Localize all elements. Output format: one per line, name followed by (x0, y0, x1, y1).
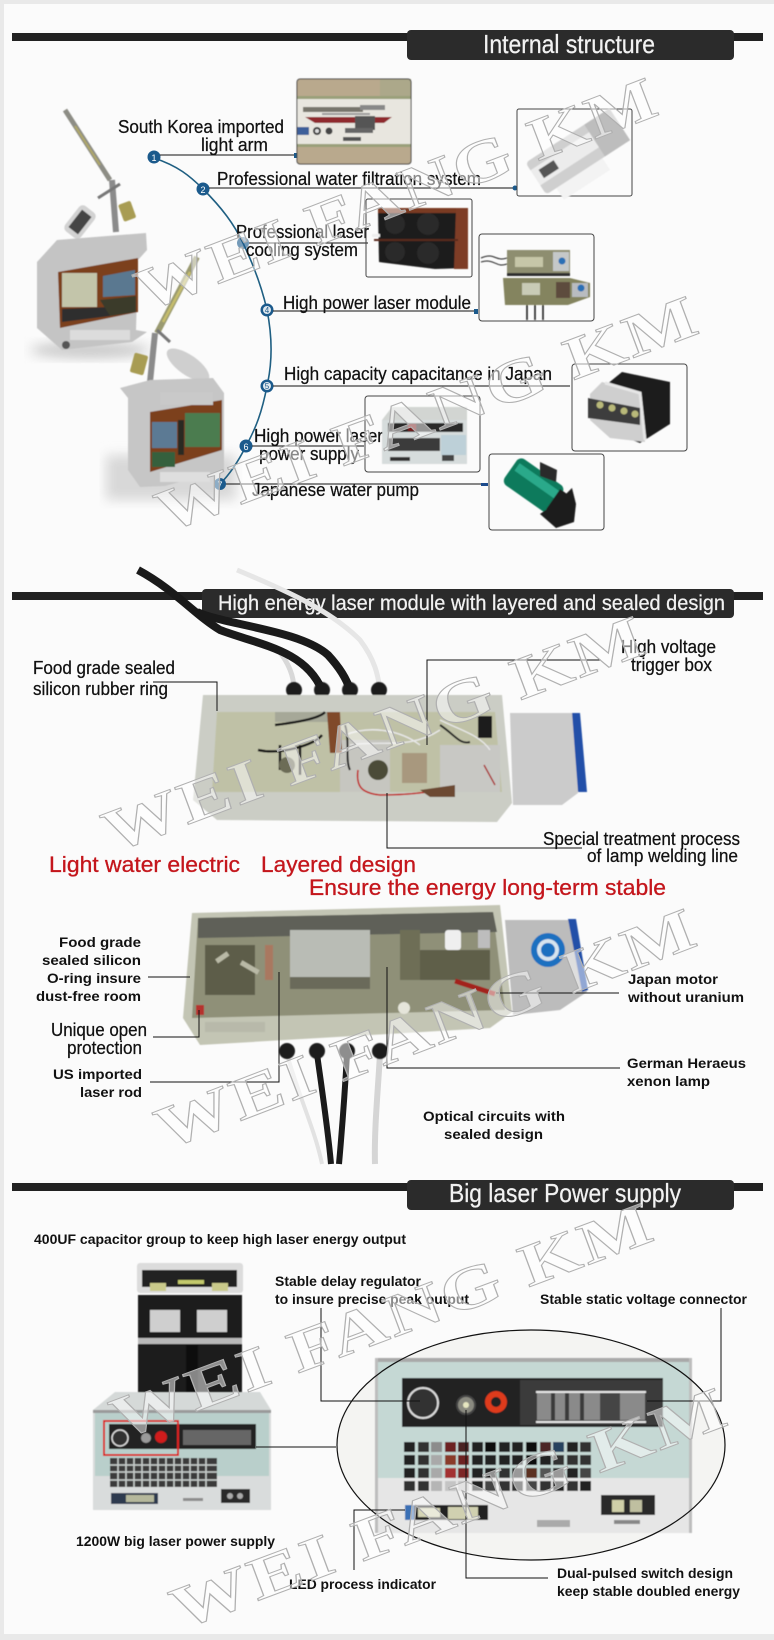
photo: power supply front (93, 1392, 271, 1510)
label: dual-pulsed switch: Dual-pulsed switch design (557, 1566, 733, 1581)
label: LED indicator (289, 1510, 437, 1592)
callout 6: power supply (240, 426, 383, 464)
label: trigger box: trigger box (631, 655, 712, 675)
label: japan motor: without uranium (627, 990, 744, 1005)
heading bar: laser module (12, 589, 763, 618)
caption: 1200W supply: 1200W big laser power supply (76, 1534, 276, 1549)
label: delay regulator (275, 1274, 470, 1401)
callout 3: cooling system (236, 222, 369, 260)
callout 4: laser module: 4 (265, 306, 270, 315)
section: power supply (12, 1178, 763, 1599)
watermark 2: WEI FANG KM (146, 282, 708, 545)
label: O-ring (36, 935, 190, 1004)
label: open protection: Unique open (51, 1020, 147, 1040)
label: dual-pulsed switch (466, 1410, 740, 1599)
watermark 4: WEI FANG KM (146, 894, 706, 1162)
label: voltage connector: Stable static voltage connector (540, 1292, 748, 1307)
magnified view (337, 1330, 725, 1560)
label: laser rod: US imported (53, 1067, 142, 1082)
callout 6: power supply: High power laser (254, 426, 383, 446)
label: xenon lamp: German Heraeus (627, 1056, 746, 1071)
label: optical circuits: Optical circuits with (423, 1109, 565, 1124)
label: O-ring: dust-free room (36, 989, 141, 1004)
watermark 1: WEI FANG KM (126, 64, 668, 324)
photo: capacitor (572, 364, 687, 451)
callout 6: power supply: power supply (259, 444, 359, 464)
label: delay regulator: Stable delay regulator (275, 1274, 422, 1289)
callout 6: power supply: 6 (243, 442, 249, 452)
callout 1: light arm: South Korea imported (118, 117, 284, 137)
red slogan: Layered design (261, 852, 416, 877)
callout 4: laser module: High power laser module (283, 293, 471, 313)
callout 7: water pump: 7 (217, 480, 223, 490)
label: voltage connector (540, 1292, 748, 1401)
photo: water pump (489, 454, 604, 530)
heading bar: laser module: High energy laser module with layered and sealed design (218, 592, 725, 615)
watermark 5: WEI FANG KM (101, 1189, 663, 1452)
watermark 3: WEI FANG KM (93, 602, 655, 865)
callout 5: capacitance: 5 (265, 382, 270, 391)
photo: power supply unit (365, 396, 480, 472)
callout 7: water pump: Japanese water pump (252, 480, 419, 500)
label: laser rod: laser rod (80, 1085, 142, 1100)
label: xenon lamp: xenon lamp (627, 1074, 710, 1089)
label: trigger box: High voltage (621, 637, 716, 657)
label: O-ring: sealed silicon (42, 953, 141, 968)
heading bar: internal structure: Internal structure (483, 29, 655, 59)
label: open protection (51, 1010, 199, 1058)
label: delay regulator: to insure precise peak output (275, 1292, 470, 1307)
label: optical circuits (423, 1109, 565, 1142)
label: japan motor: Japan motor (628, 972, 719, 987)
label: xenon lamp (387, 967, 746, 1089)
section: internal structure (12, 29, 763, 530)
callout 5: capacitance: High capacity capacitance in Japan (284, 364, 552, 384)
red slogan: Light water electric (49, 852, 240, 877)
label: silicon rubber ring (33, 658, 217, 711)
callout 3: cooling system: Professional laser (236, 222, 369, 242)
numbered connector curve (154, 158, 271, 484)
red slogan (49, 852, 666, 900)
label: dual-pulsed switch: keep stable doubled energy (557, 1584, 740, 1599)
label: O-ring: O-ring insure (47, 971, 142, 986)
callout 1: light arm: light arm (201, 135, 268, 155)
label: LED indicator: LED process indicator (289, 1577, 437, 1592)
label: open protection: protection (67, 1038, 142, 1058)
module photo: upper (193, 682, 587, 822)
callout 7: water pump (214, 478, 488, 500)
label: silicon rubber ring: Food grade sealed (33, 658, 175, 678)
connector to magnified view (256, 1446, 336, 1448)
callout 2: water filtration: Professional water filtration system (217, 169, 481, 189)
section: laser module (12, 570, 763, 1164)
cables: top (138, 570, 380, 690)
heading bar: internal structure (12, 29, 763, 60)
heading bar: power supply (12, 1178, 763, 1210)
photo: water filter (517, 108, 638, 206)
caption: capacitor group: 400UF capacitor group to keep high laser energy output (34, 1232, 407, 1247)
heading bar: power supply: Big laser Power supply (449, 1178, 681, 1208)
label: lamp welding line: Special treatment process (543, 829, 740, 849)
callout 2: water filtration: 2 (200, 185, 206, 195)
label: silicon rubber ring: silicon rubber ring (33, 679, 168, 699)
label: O-ring: Food grade (59, 935, 142, 950)
label: laser rod (53, 972, 279, 1100)
machine illustration: lower (106, 257, 236, 500)
red slogan: Ensure the energy long-term stable (309, 875, 666, 900)
label: lamp welding line: of lamp welding line (587, 846, 738, 866)
cables: bottom (287, 1054, 380, 1164)
photo: capacitor group (137, 1263, 243, 1415)
photo: laser modules (479, 234, 594, 321)
module photo: lower (183, 905, 588, 1059)
callout 5: capacitance (260, 364, 570, 392)
label: trigger box (427, 637, 716, 745)
label: optical circuits: sealed design (444, 1127, 543, 1142)
watermark 6: WEI FANG KM (161, 1374, 737, 1640)
callout 1: light arm (118, 117, 298, 164)
label: japan motor (496, 972, 744, 1005)
callout 3: cooling system: cooling system (246, 240, 358, 260)
machine illustration: upper (30, 110, 150, 358)
callout 2: water filtration (196, 169, 518, 196)
photo: light arm parts (297, 79, 411, 164)
callout 1: light arm: 1 (151, 153, 157, 163)
photo: cooling fans (366, 199, 472, 277)
label: lamp welding line (387, 793, 740, 866)
